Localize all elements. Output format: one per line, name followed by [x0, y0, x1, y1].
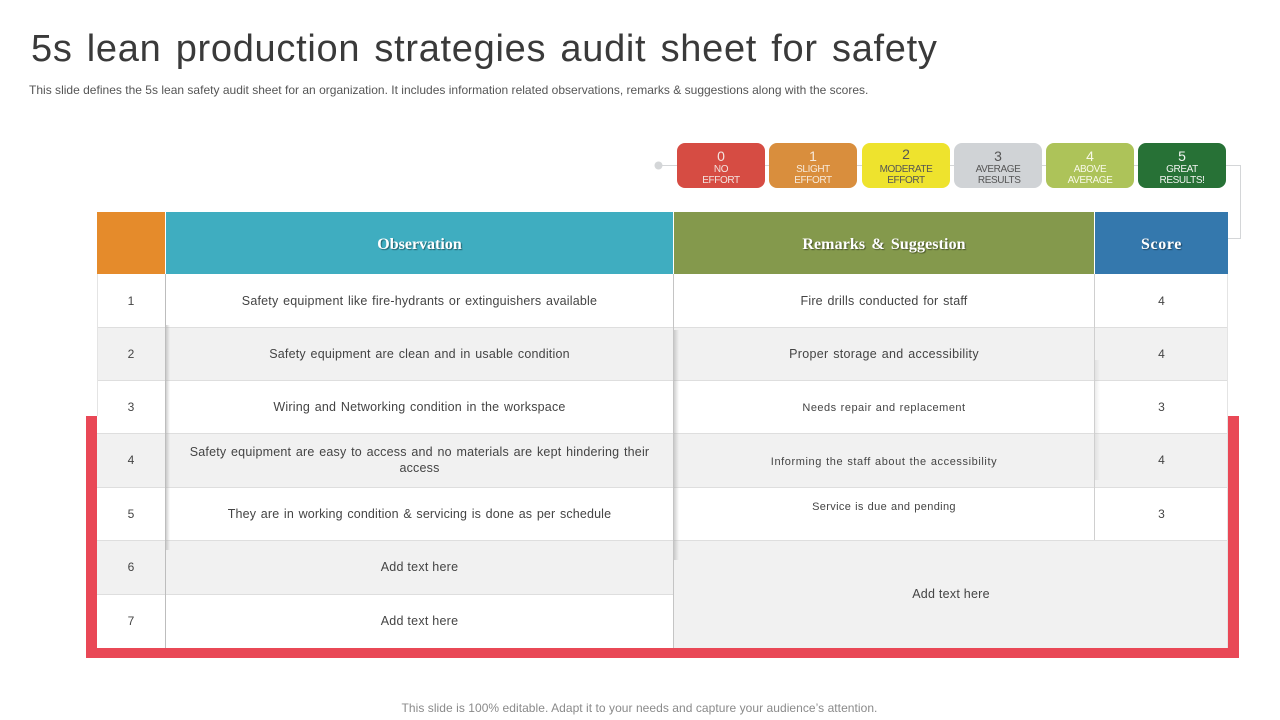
merged cell background	[674, 540, 1228, 648]
legend 0: 0	[717, 148, 725, 164]
row 4 background	[97, 433, 1228, 487]
subtitle: This slide defines the 5s lean safety audit sheet for an organization. It includes information related observations, remarks & suggestions along with the scores.	[29, 83, 868, 97]
legend 5: 5	[1178, 148, 1186, 164]
legend 2: EFFORT	[887, 175, 925, 186]
observation 2: Safety equipment are clean and in usable condition	[269, 346, 570, 360]
number 2: 2	[128, 346, 134, 360]
legend 2: 2	[902, 146, 910, 162]
merged remark: Add text here	[912, 587, 990, 601]
remark 4: Informing the staff about the accessibility	[771, 456, 997, 468]
legend 3: AVERAGE	[976, 164, 1020, 175]
observation column	[190, 294, 649, 628]
header: number column	[97, 212, 165, 274]
legend 4: 4	[1086, 148, 1094, 164]
score 1: 4	[1158, 294, 1165, 308]
legend 3: 3	[994, 148, 1002, 164]
row numbers	[128, 294, 134, 628]
remark 1: Fire drills conducted for staff	[800, 294, 967, 308]
number 7: 7	[128, 614, 134, 628]
header: score: Score	[1141, 236, 1182, 252]
red frame	[86, 416, 1239, 658]
score legend	[677, 143, 1226, 188]
legend 0: EFFORT	[702, 175, 740, 186]
number 1: 1	[128, 294, 134, 308]
header: observation	[166, 212, 673, 274]
legend 1	[769, 143, 857, 188]
connector line	[654, 162, 1241, 239]
legend 0: NO	[714, 164, 728, 175]
legend 1: EFFORT	[794, 175, 832, 186]
header: remarks and suggestion	[674, 212, 1094, 274]
legend 3	[954, 143, 1042, 188]
score 2: 4	[1158, 346, 1165, 360]
title: 5s lean production strategies audit sheet for safety	[31, 28, 938, 70]
row 2 background	[97, 327, 1228, 380]
legend 1: SLIGHT	[796, 164, 830, 175]
row 6 background	[97, 540, 674, 594]
number 4: 4	[128, 453, 134, 467]
score 4: 4	[1158, 453, 1165, 467]
number 5: 5	[128, 506, 134, 520]
legend 4	[1046, 143, 1134, 188]
header: remarks and suggestion: Remarks & Suggestion	[802, 236, 966, 252]
legend 0	[677, 143, 765, 188]
legend 1: 1	[809, 148, 817, 164]
legend 3: RESULTS	[978, 175, 1020, 186]
legend 4: ABOVE	[1074, 164, 1106, 175]
observation 5: They are in working condition & servicing is done as per schedule	[228, 506, 611, 520]
footer note: This slide is 100% editable. Adapt it to your needs and capture your audience’s attention.	[402, 701, 877, 715]
observation 1: Safety equipment like fire-hydrants or extinguishers available	[242, 294, 597, 308]
observation 3: Wiring and Networking condition in the workspace	[273, 400, 566, 414]
score 5: 3	[1158, 506, 1165, 520]
score 3: 3	[1158, 400, 1165, 414]
legend 5: GREAT	[1166, 164, 1198, 175]
header: observation: Observation	[377, 236, 462, 252]
table	[97, 212, 1228, 648]
legend 4: AVERAGE	[1068, 175, 1112, 186]
remark 2: Proper storage and accessibility	[789, 346, 979, 360]
observation 4: Safety equipment are easy to access and no materials are kept hindering their access	[190, 445, 649, 475]
observation 7: Add text here	[381, 614, 458, 628]
header: score	[1095, 212, 1228, 274]
observation 6: Add text here	[381, 560, 458, 574]
remarks column	[771, 294, 997, 513]
remark 3: Needs repair and replacement	[802, 402, 966, 414]
remark 5: Service is due and pending	[812, 501, 956, 513]
number 6: 6	[128, 560, 134, 574]
legend 2: MODERATE	[880, 164, 932, 175]
number 3: 3	[128, 400, 134, 414]
score column	[1158, 294, 1165, 520]
legend 5	[1138, 143, 1226, 188]
legend 2	[862, 143, 950, 188]
legend 5: RESULTS!	[1160, 175, 1204, 186]
